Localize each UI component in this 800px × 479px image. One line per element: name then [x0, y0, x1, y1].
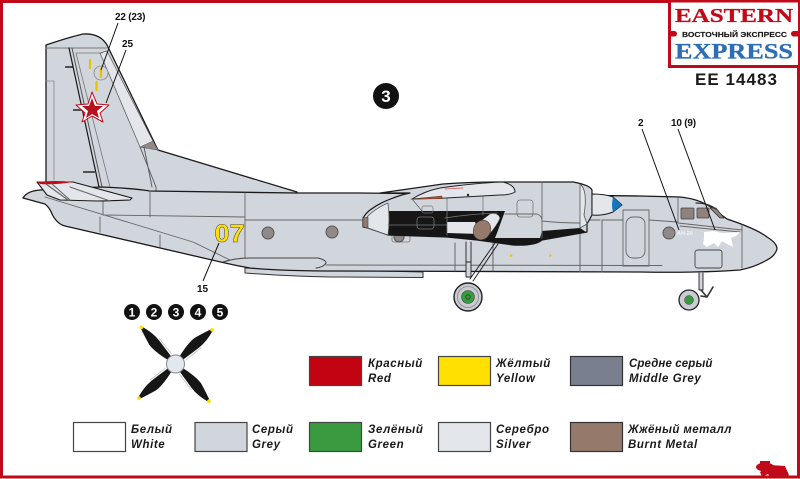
- legend: green: Зелёный: [368, 424, 423, 436]
- propeller spinner: [592, 194, 622, 215]
- logo: Eastern Express: EASTERN: [675, 5, 794, 27]
- logo: Eastern Express: [669, 1, 800, 66]
- type marking: АН-26: [677, 231, 693, 237]
- propeller scheme numbers: 1: [129, 306, 136, 320]
- main landing gear: [454, 242, 498, 311]
- legend: red: [310, 356, 423, 386]
- legend: yellow: Yellow: [496, 373, 536, 385]
- callout 25: [106, 39, 134, 103]
- legend: grey: Серый: [252, 424, 294, 436]
- legend: burnt metal: [570, 422, 732, 452]
- legend: white: Белый: [131, 424, 173, 436]
- callout 15: 15: [197, 284, 209, 295]
- legend: silver: [438, 422, 550, 452]
- propeller scheme numbers: 2: [151, 306, 158, 320]
- legend: grey: Grey: [252, 439, 281, 451]
- legend: silver: Серебро: [496, 424, 550, 436]
- polar bear emblem: [703, 231, 740, 247]
- callout 25: 25: [122, 39, 134, 50]
- legend: red: Red: [368, 373, 392, 385]
- legend: yellow: Жёлтый: [495, 358, 551, 370]
- legend: grey: [195, 422, 294, 452]
- legend: yellow: [438, 356, 551, 386]
- propeller: [134, 322, 217, 406]
- nose landing gear: [679, 273, 713, 310]
- legend: middle grey: Средне серый: [629, 358, 713, 370]
- scheme number 3: [373, 83, 399, 109]
- icon: red bull mark: [756, 461, 789, 477]
- logo: Eastern Express: EXPRESS: [675, 38, 793, 64]
- aircraft number 07: 07: [214, 220, 244, 248]
- legend: burnt metal: Burnt Metal: [628, 439, 698, 451]
- aircraft side view: [23, 34, 777, 311]
- scheme number 3: 3: [381, 87, 391, 106]
- star insignia: [76, 92, 109, 122]
- legend: silver: Silver: [496, 439, 531, 451]
- stabilizer: [37, 181, 132, 201]
- callout 2: 2: [638, 118, 644, 129]
- legend: green: [310, 422, 423, 452]
- legend: green: Green: [368, 439, 404, 451]
- legend: red: Красный: [368, 358, 423, 370]
- callout 22 (23): 22 (23): [115, 12, 145, 23]
- tail fin: [46, 34, 297, 200]
- propeller scheme numbers: [124, 304, 228, 320]
- legend: white: White: [131, 439, 165, 451]
- propeller scheme numbers: 3: [173, 306, 180, 320]
- propeller scheme numbers: 5: [217, 306, 224, 320]
- legend: burnt metal: Жжёный металл: [627, 424, 732, 436]
- black engine panel: [388, 211, 586, 245]
- fuselage: [23, 187, 777, 272]
- logo: Eastern Express: ВОСТОЧНЫЙ ЭКСПРЕСС: [682, 30, 788, 39]
- callout 22 (23): [101, 12, 145, 70]
- callout 10 (9): [671, 118, 715, 230]
- legend: white: [74, 422, 173, 452]
- ventral strake: [245, 268, 423, 278]
- callout 15: [197, 243, 219, 295]
- legend: middle grey: [570, 356, 713, 386]
- callout 10 (9): 10 (9): [671, 118, 696, 129]
- legend: middle grey: Middle Grey: [629, 373, 701, 385]
- engine nacelle and wing: [363, 182, 592, 245]
- model number: EE 14483: [695, 70, 777, 89]
- callout 2: [638, 118, 679, 230]
- propeller scheme numbers: 4: [195, 306, 202, 320]
